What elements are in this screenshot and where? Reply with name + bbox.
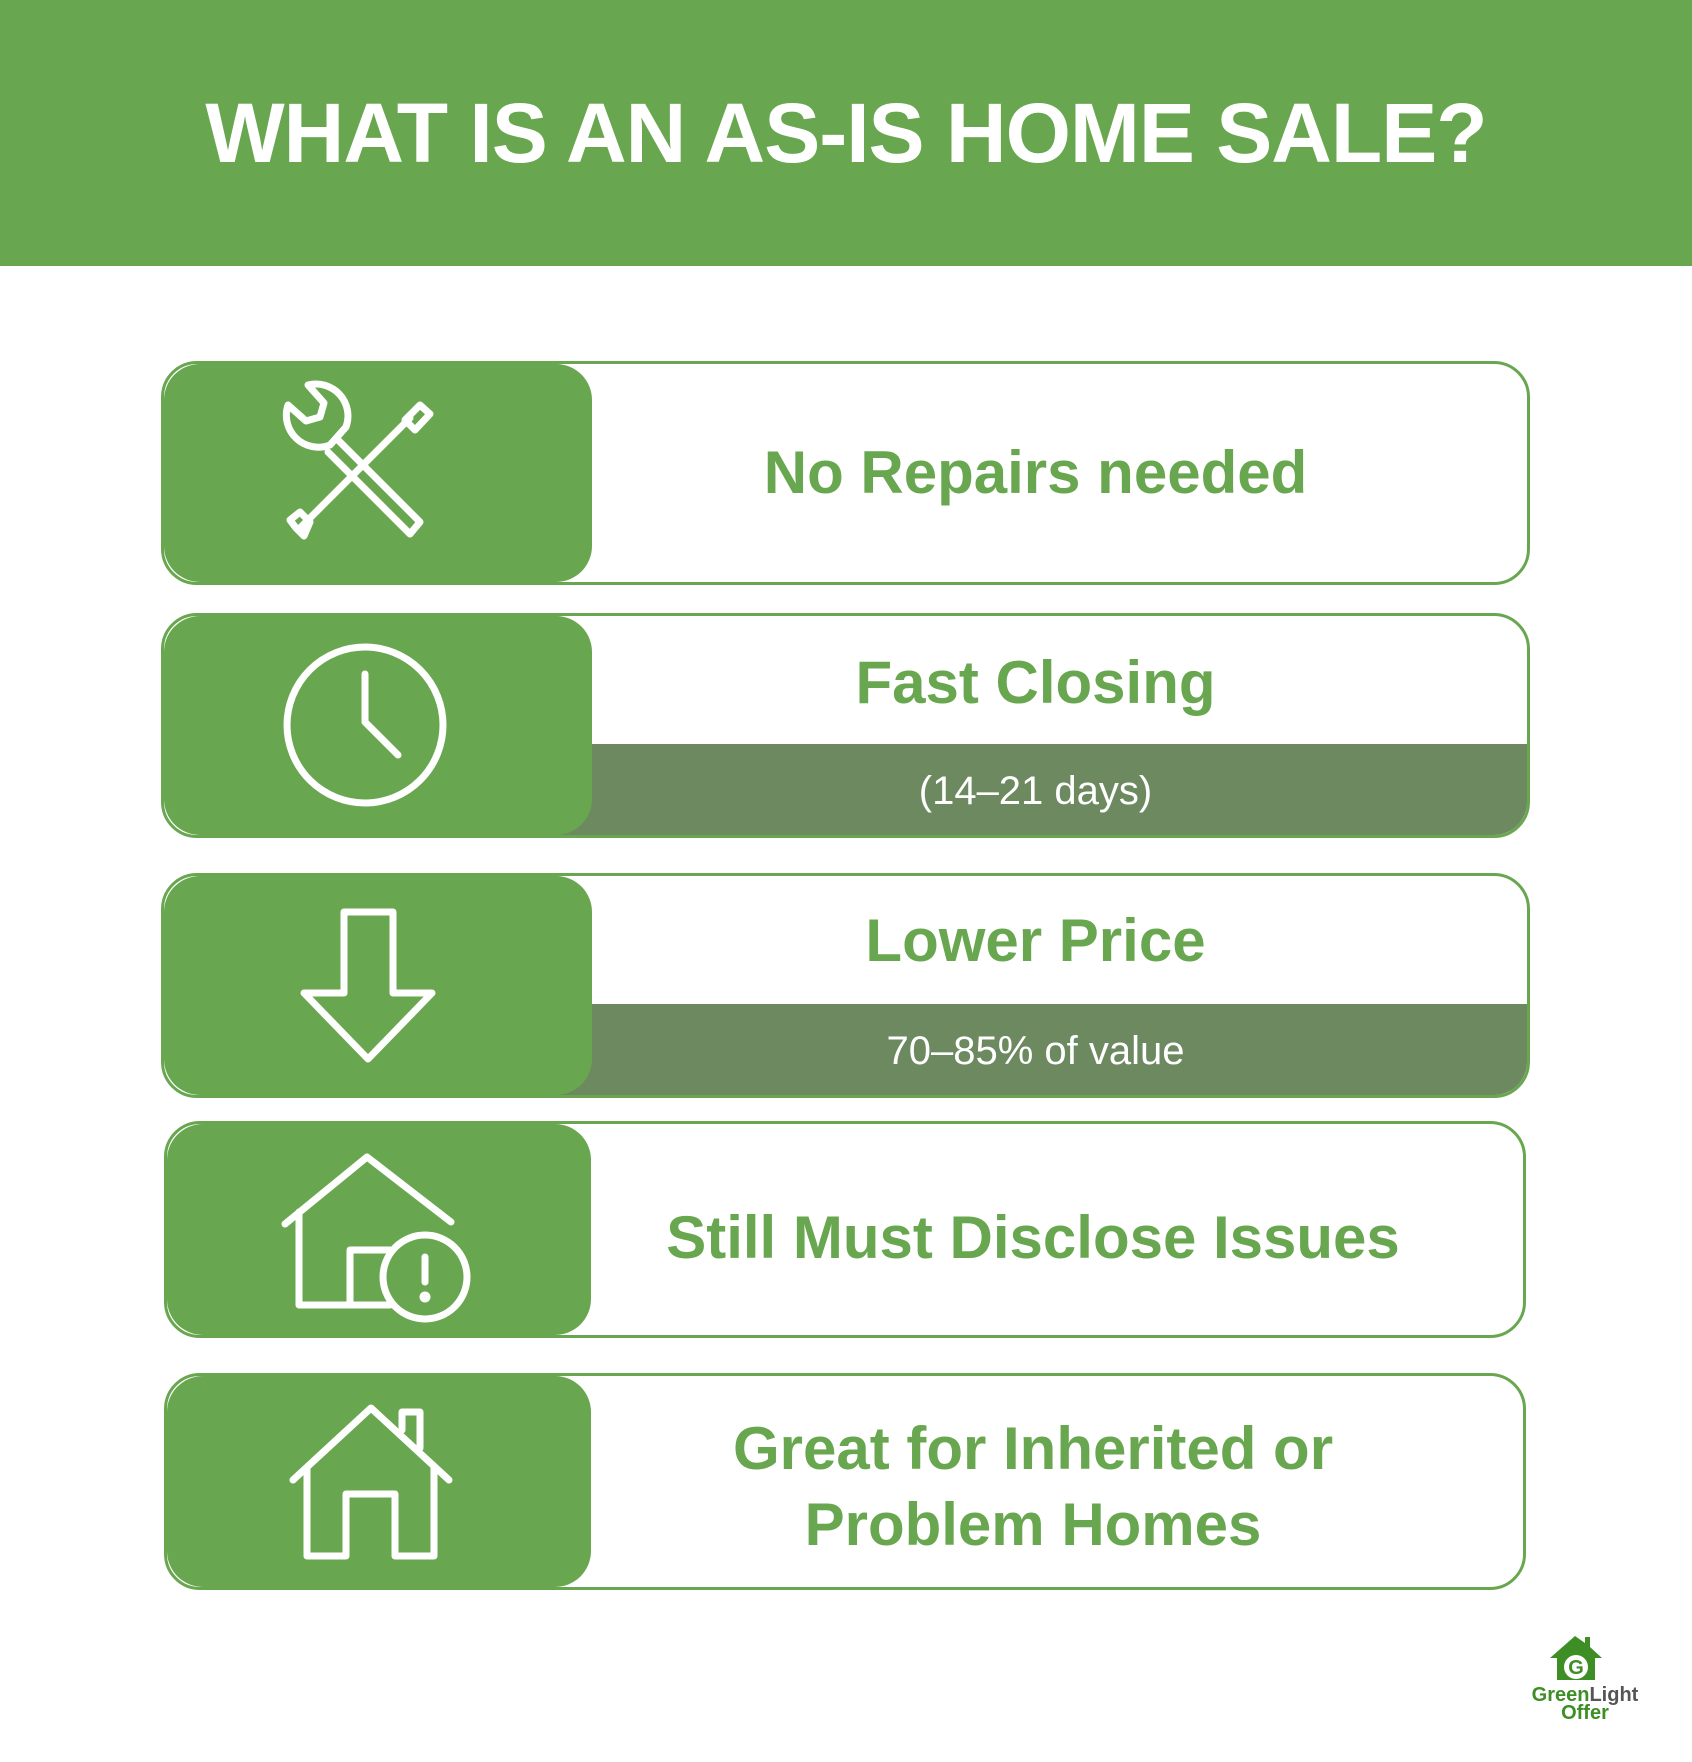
text: fast closing: Fast Closing [855, 649, 1216, 716]
logo: Offer [1561, 1702, 1609, 1724]
title [0, 0, 1692, 266]
panel: inherited [164, 1373, 1526, 1590]
panel: fast closing [161, 613, 1530, 838]
text: inherited [733, 1415, 1333, 1558]
icon: house with alert [285, 1157, 467, 1319]
band: 70-85%: 70–85% of value [886, 1029, 1184, 1073]
icon: clock [287, 647, 443, 803]
icon: down arrow [304, 912, 432, 1059]
icon: tools [286, 384, 430, 536]
band: 14-21 days: (14–21 days) [919, 769, 1152, 813]
panel: lower price [161, 873, 1530, 1098]
title: WHAT IS AN AS-IS HOME SALE? [205, 86, 1487, 180]
panel: no repairs [161, 361, 1530, 585]
icon: house [293, 1408, 449, 1556]
text: disclose: Still Must Disclose Issues [666, 1204, 1400, 1271]
text: lower price: Lower Price [865, 907, 1206, 974]
text: inherited: Great for Inherited or [733, 1415, 1333, 1482]
logo: G [1568, 1657, 1584, 1679]
band: 14-21 days [544, 744, 1527, 835]
logo [1532, 1636, 1638, 1724]
panel: disclose [164, 1121, 1526, 1338]
band: 70-85% [544, 1004, 1527, 1095]
text: no repairs: No Repairs needed [764, 439, 1307, 506]
text: inherited: Problem Homes [805, 1491, 1261, 1558]
logo: GreenLight [1532, 1684, 1638, 1706]
